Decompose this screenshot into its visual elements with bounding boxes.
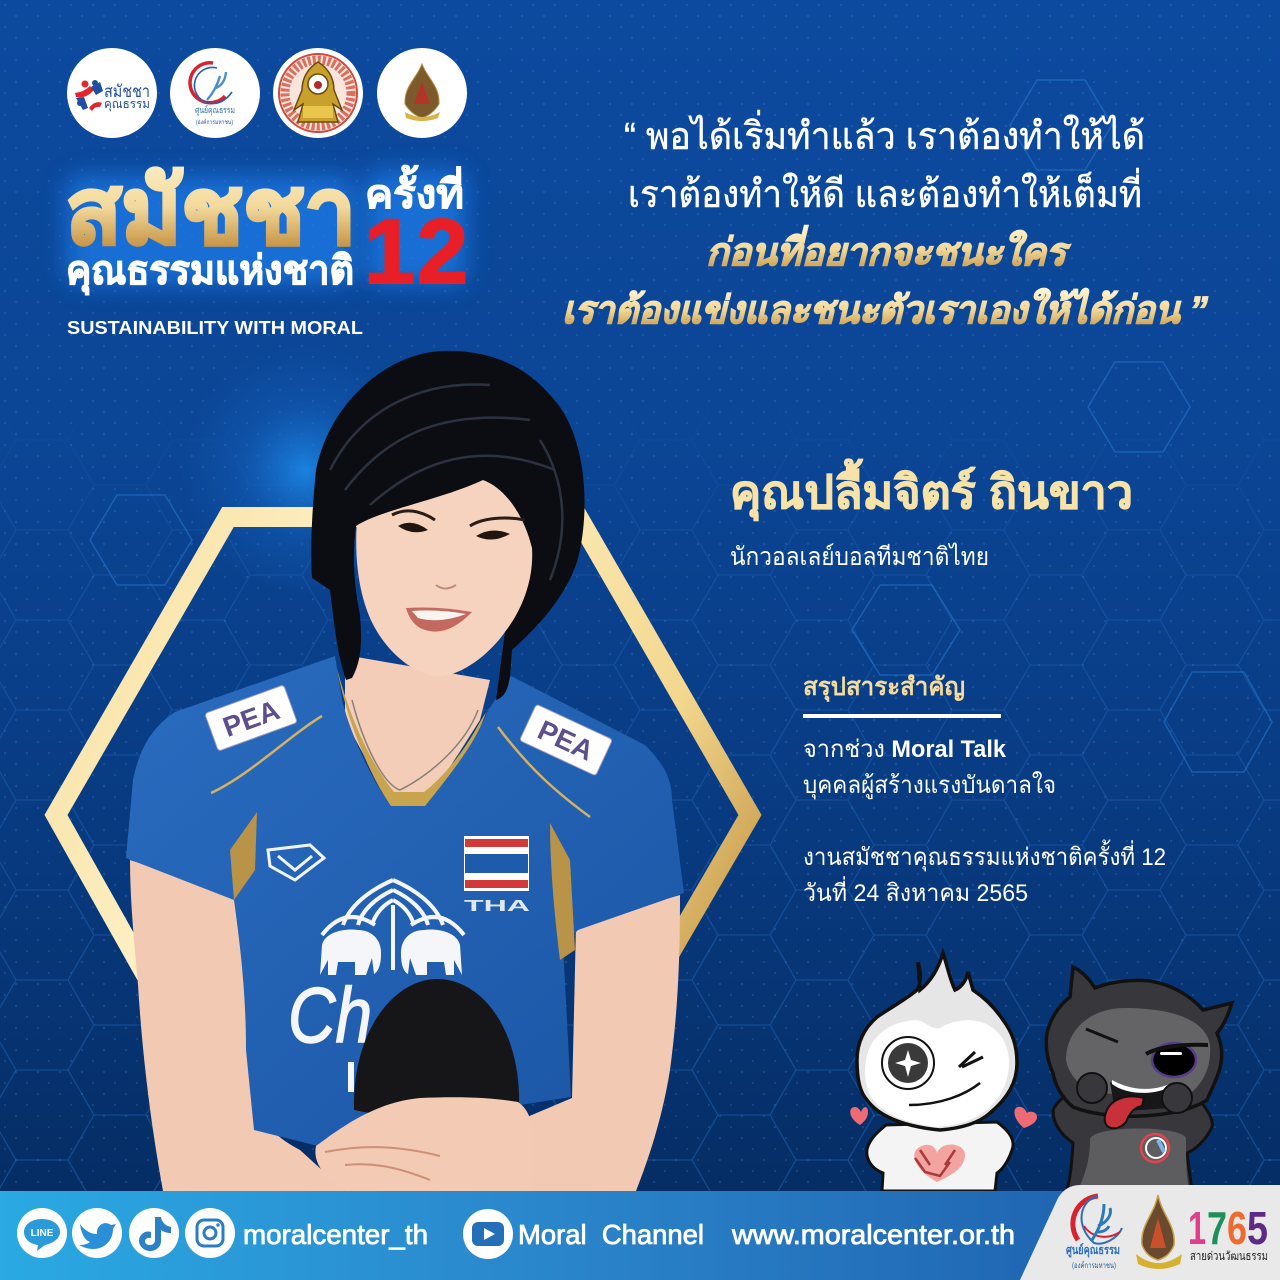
logo: ศูนย์คุณธรรม: ศูนย์คุณธรรม <box>1066 1243 1120 1258</box>
icon: Instagram <box>185 1208 235 1258</box>
logo: 1765 hotline: 1 <box>1188 1202 1206 1254</box>
mascot: dark <box>1046 967 1232 1191</box>
logo: temple seal <box>377 48 467 138</box>
sponsor mark <box>288 880 464 1092</box>
Thai flag badge: THA <box>464 898 531 915</box>
handle: moralcenter_th <box>243 1219 428 1250</box>
left arm <box>130 860 345 1191</box>
logo: ศูนย์คุณธรรม: (องค์การมหาชน) <box>196 118 233 126</box>
icon: LINE <box>17 1208 67 1258</box>
PEA patch right: PEA <box>533 714 598 767</box>
logo: 1765 hotline: 5 <box>1247 1202 1268 1254</box>
website: www.moralcenter.or.th <box>731 1219 1015 1250</box>
quote line 4: เราต้องแข่งและชนะตัวเราเองให้ได้ก่อน ” <box>562 288 1208 332</box>
sports brand mark <box>268 845 324 880</box>
quote line 3: ก่อนที่อยากจะชนะใคร <box>706 225 1072 274</box>
footer logo panel <box>1020 1185 1280 1280</box>
logo: กระทรวงศึกษาธิการ <box>273 48 363 138</box>
facial features <box>392 511 525 632</box>
mascot: white <box>850 953 1037 1191</box>
paddle <box>354 979 519 1125</box>
summary text 1: จากช่วง Moral Talk <box>803 736 1007 763</box>
PEA patch left: PEA <box>219 694 284 743</box>
person photo illustration <box>126 351 684 1191</box>
jersey <box>126 656 684 1146</box>
summary text 3: งานสมัชชาคุณธรรมแห่งชาติครั้งที่ 12 <box>803 839 1166 872</box>
heading: ครั้งที่: ครั้งที่ <box>365 165 464 217</box>
eyebrows <box>392 511 525 526</box>
channel name: Moral Channel <box>518 1219 704 1250</box>
heading: สมัชชา: สมัชชา <box>66 161 356 263</box>
tagline: SUSTAINABILITY WITH MORAL <box>67 317 363 338</box>
logo: สมัชชาคุณธรรม <box>67 48 157 138</box>
title glow <box>66 170 466 284</box>
heading: 12: 12 <box>364 201 468 303</box>
heading: คุณธรรมแห่งชาติ: คุณธรรมแห่งชาติ <box>66 249 354 296</box>
logo: ศูนย์คุณธรรม <box>170 48 260 138</box>
smile <box>406 608 472 632</box>
nose <box>436 585 456 588</box>
gold side panels <box>230 812 575 960</box>
face <box>356 460 534 676</box>
hands <box>315 1097 534 1191</box>
summary text 2: บุคคลผู้สร้างแรงบันดาลใจ <box>803 771 1056 800</box>
icon: TikTok <box>129 1208 179 1258</box>
quote <box>562 110 1208 332</box>
shoulder piping <box>211 716 590 817</box>
speaker name: คุณปลื้มจิตร์ ถินขาว <box>730 458 1133 521</box>
collar trim <box>337 668 486 806</box>
hair <box>311 351 585 700</box>
summary block <box>803 673 1166 907</box>
speaker role: นักวอลเลย์บอลทีมชาติไทย <box>730 542 989 571</box>
logo: สมัชชาคุณธรรม: สมัชชา <box>104 82 150 101</box>
sponsor mark: Ch <box>288 971 372 1059</box>
icon: YouTube <box>463 1209 513 1259</box>
summary rule <box>803 714 1001 718</box>
logo: สมัชชาคุณธรรม: คุณธรรม <box>104 97 150 112</box>
gold hexagon frame <box>56 517 750 975</box>
logo: temple seal <box>1136 1195 1182 1269</box>
logo: 1765 hotline: 6 <box>1227 1202 1247 1254</box>
PEA patch right <box>519 704 613 776</box>
logo: 1765 hotline <box>1188 1202 1268 1263</box>
neck <box>345 655 490 806</box>
footer bar <box>0 1191 1280 1280</box>
logo: ศูนย์คุณธรรม: (องค์การมหาชน) <box>1072 1260 1116 1270</box>
quote line 2: เราต้องทำให้ดี และต้องทำให้เต็มที่ <box>628 168 1142 216</box>
logo: 1765 hotline: 7 <box>1207 1202 1227 1254</box>
right arm <box>470 895 680 1191</box>
eyes <box>398 523 510 540</box>
necklace <box>352 700 478 790</box>
logo row <box>67 48 467 138</box>
quote line 1: “ พอได้เริ่มทำแล้ว เราต้องทำให้ได้ <box>624 110 1145 158</box>
logo: ศูนย์คุณธรรม: ศูนย์คุณธรรม <box>195 104 235 116</box>
PEA patch left <box>205 685 297 751</box>
event title lockup <box>66 161 468 338</box>
summary text 4: วันที่ 24 สิงหาคม 2565 <box>803 876 1028 907</box>
summary heading: สรุปสาระสำคัญ <box>803 673 965 703</box>
Thai flag badge <box>464 836 531 915</box>
logo: ศูนย์คุณธรรม <box>1066 1196 1122 1270</box>
icon: LINE: LINE <box>31 1228 54 1239</box>
icon: Twitter <box>72 1208 122 1258</box>
